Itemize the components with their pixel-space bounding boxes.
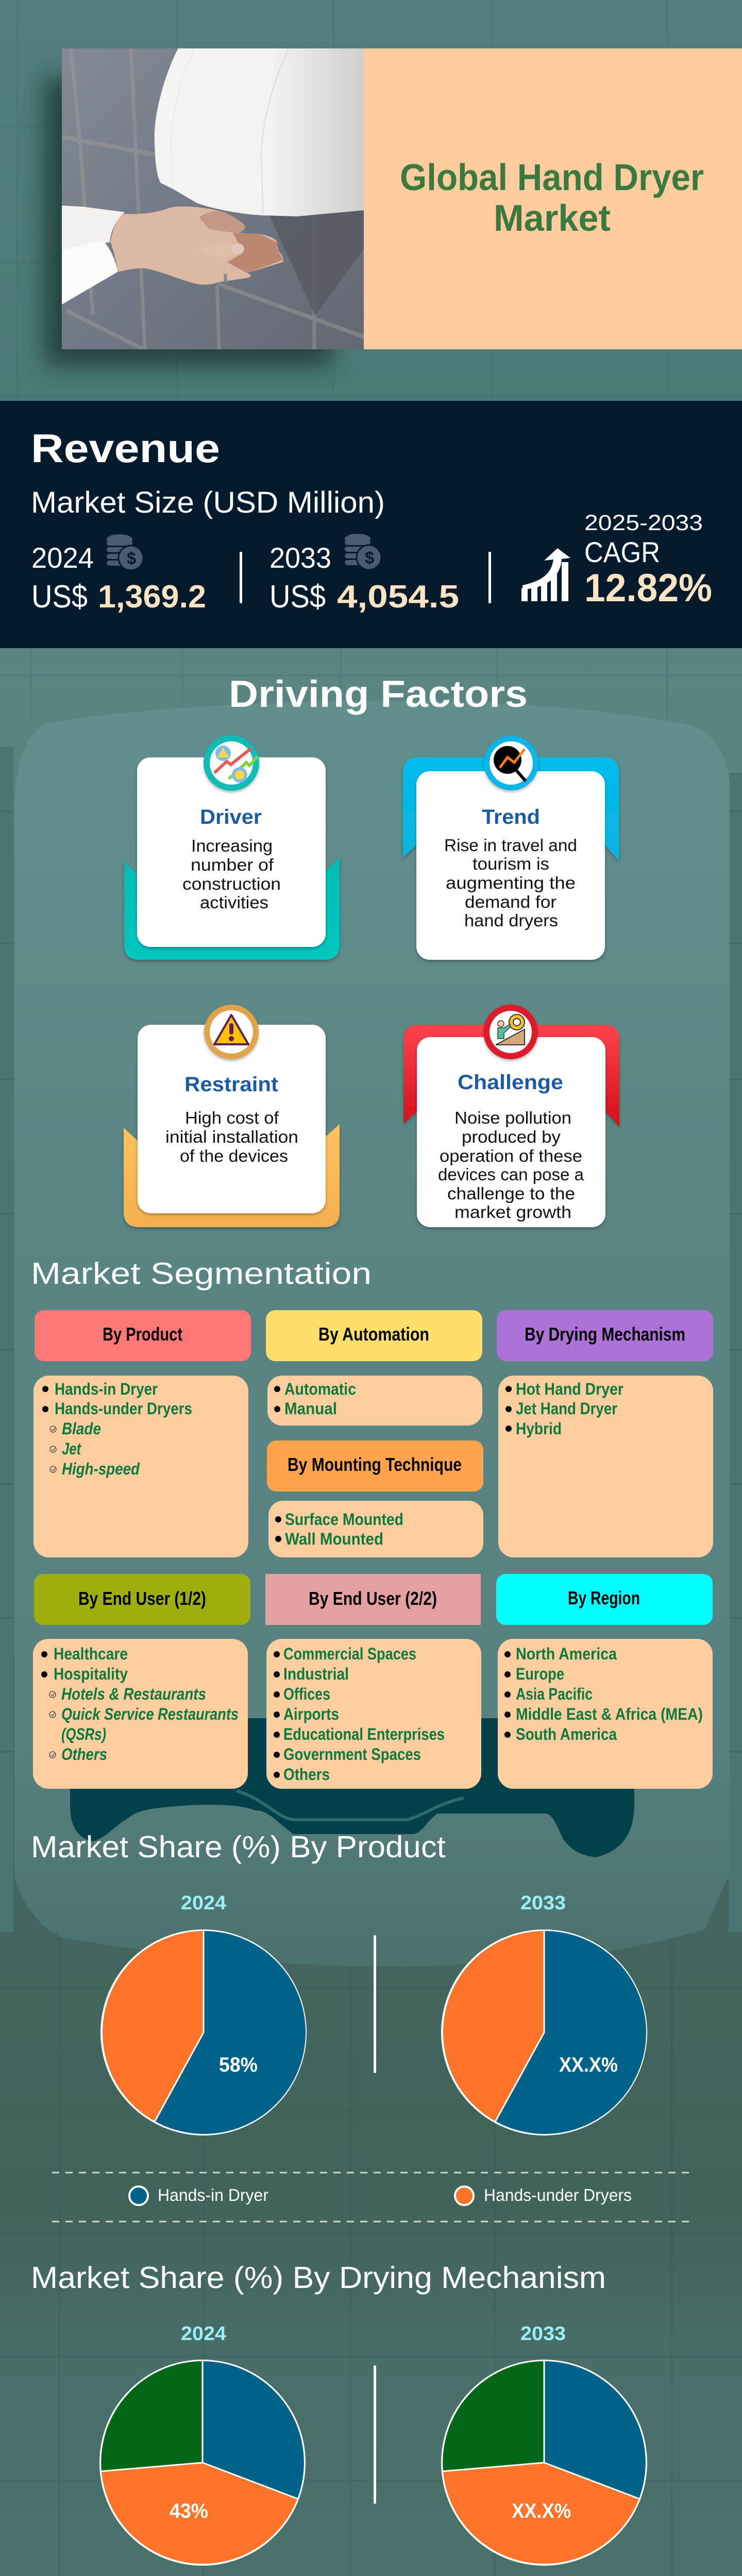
restraint text: of the devices xyxy=(180,1146,288,1165)
challenge text: challenge to the xyxy=(447,1184,575,1203)
challenge text: produced by xyxy=(462,1127,561,1146)
segment: by end user 1: By End User (1/2) xyxy=(78,1588,206,1609)
segment: by mounting technique: Surface Mounted xyxy=(285,1510,403,1529)
segment: by end user 2: Industrial xyxy=(283,1665,349,1683)
trend text: demand for xyxy=(465,892,556,911)
segment: by region: North America xyxy=(516,1645,617,1663)
segment: by end user 1: Hospitality xyxy=(54,1665,128,1683)
revenue heading: Revenue xyxy=(31,426,220,471)
segment: by drying mechanism: Jet Hand Dryer xyxy=(516,1399,617,1418)
heading: market share by product: Market Share (%) By Product xyxy=(31,1830,446,1864)
driver text xyxy=(182,836,281,912)
card: challenge xyxy=(403,1005,619,1227)
chart: mechanism pie 2033: 2033 xyxy=(520,2323,566,2345)
driver text: construction xyxy=(182,874,281,893)
segment: by end user 2: Educational Enterprises xyxy=(283,1725,445,1743)
icon: coins 2033: $ xyxy=(365,548,374,567)
CAGR: 2025-2033 xyxy=(584,511,703,535)
legend: product: Hands-in Dryer xyxy=(158,2185,268,2205)
chart: mechanism pie 2033: XX.X% xyxy=(512,2500,571,2522)
card: driver xyxy=(124,735,340,960)
segment: by mounting technique xyxy=(267,1440,483,1557)
2024 value: 2024 xyxy=(31,541,94,574)
title: Market xyxy=(494,198,611,239)
divider xyxy=(374,1935,376,2073)
chart: mechanism pie 2024 xyxy=(99,2323,306,2566)
segment: by automation: Manual xyxy=(284,1399,337,1418)
segment: by end user 1: (QSRs) xyxy=(61,1725,106,1743)
segment: by region: South America xyxy=(516,1725,617,1743)
segment: by end user 2 xyxy=(265,1574,481,1789)
segment: by region: Middle East & Africa (MEA) xyxy=(516,1705,703,1723)
chart: mechanism pie 2024: 2024 xyxy=(181,2323,226,2345)
heading: market segmentation: Market Segmentation xyxy=(31,1257,372,1291)
segment: by mounting technique: Wall Mounted xyxy=(285,1530,383,1548)
segment: by end user 1 xyxy=(33,1574,250,1789)
heading: driving factors: Driving Factors xyxy=(229,673,528,715)
heading: market share by drying mechanism: Market Share (%) By Drying Mechanism xyxy=(31,2261,606,2295)
segment: by drying mechanism xyxy=(497,1310,713,1557)
segment: by product: Hands-in Dryer xyxy=(55,1380,158,1398)
chart: product pie 2033: XX.X% xyxy=(559,2054,618,2076)
2033 value xyxy=(269,541,459,615)
challenge text: Noise pollution xyxy=(454,1108,571,1127)
hero photo: hands under a white dryer xyxy=(57,45,369,357)
driver title: Driver xyxy=(200,806,262,828)
2024 value: US$ xyxy=(31,579,88,615)
segment: by drying mechanism: By Drying Mechanism xyxy=(525,1324,685,1345)
restraint text: initial installation xyxy=(165,1127,298,1146)
divider xyxy=(488,552,491,603)
restraint text xyxy=(165,1108,298,1165)
2024 value xyxy=(31,541,206,615)
segment: by mounting technique: By Mounting Technique xyxy=(288,1454,462,1475)
photo shadow xyxy=(44,77,332,366)
chart: product pie 2033 xyxy=(441,1892,647,2136)
segment: by product: Blade xyxy=(62,1419,101,1438)
title xyxy=(400,157,704,239)
challenge text xyxy=(438,1108,584,1222)
chart: product pie 2024: 58% xyxy=(219,2054,258,2076)
revenue band xyxy=(0,401,742,648)
segment: by region: By Region xyxy=(568,1587,640,1608)
segment: by end user 1: Healthcare xyxy=(54,1645,128,1663)
trend text: tourism is xyxy=(473,854,549,873)
icon: growth arrow xyxy=(521,548,570,601)
title panel xyxy=(364,48,742,349)
icon: warning triangle xyxy=(214,1015,248,1044)
segment: by end user 2: Offices xyxy=(283,1685,330,1703)
segment: by product: Hands-under Dryers xyxy=(55,1399,192,1418)
CAGR: CAGR xyxy=(584,536,660,568)
card: trend xyxy=(403,736,619,960)
trend text: hand dryers xyxy=(464,911,558,930)
segment: by end user 2: Airports xyxy=(283,1705,339,1723)
challenge text: operation of these xyxy=(440,1146,582,1165)
segment: by automation: By Automation xyxy=(318,1324,429,1345)
2033 value: 4,054.5 xyxy=(337,579,459,615)
icon: magnifier with trend line xyxy=(494,746,526,781)
segment: by automation: Automatic xyxy=(284,1380,356,1398)
segment: by product: By Product xyxy=(103,1324,182,1345)
chart: product pie 2024: 2024 xyxy=(181,1892,226,1914)
segment: by product xyxy=(33,1310,251,1557)
segment: by end user 1: Hotels & Restaurants xyxy=(61,1685,206,1703)
driver text: activities xyxy=(200,893,268,912)
icon: coins 2033 xyxy=(345,534,381,570)
chart: product pie 2024 xyxy=(100,1892,307,2136)
trend text xyxy=(444,836,577,930)
challenge title: Challenge xyxy=(458,1071,563,1094)
challenge text: devices can pose a xyxy=(438,1165,584,1184)
segment: by product: High-speed xyxy=(62,1460,140,1478)
chart: product pie 2033: 2033 xyxy=(520,1892,566,1914)
challenge text: market growth xyxy=(454,1202,571,1222)
segment: by end user 1: Quick Service Restaurants xyxy=(61,1705,239,1723)
divider xyxy=(240,552,242,603)
segment: by drying mechanism: Hot Hand Dryer xyxy=(516,1380,623,1398)
title: Global Hand Dryer xyxy=(400,157,704,198)
icon: driver arrows and gears xyxy=(214,745,258,783)
trend text: Rise in travel and xyxy=(444,836,577,855)
segment: by drying mechanism: Hybrid xyxy=(516,1419,562,1438)
segment: by end user 2: Government Spaces xyxy=(283,1745,421,1764)
market size label: Market Size (USD Million) xyxy=(31,486,385,519)
segment: by automation xyxy=(266,1310,482,1426)
CAGR: 12.82% xyxy=(584,566,712,610)
driver text: number of xyxy=(191,855,274,874)
segment: by end user 2: By End User (2/2) xyxy=(309,1588,437,1609)
restraint title: Restraint xyxy=(184,1073,278,1096)
legend: product: Hands-under Dryers xyxy=(484,2185,632,2205)
chart: mechanism pie 2024: 43% xyxy=(170,2500,208,2522)
2033 value: 2033 xyxy=(269,541,331,574)
segment: by region: Europe xyxy=(516,1665,564,1683)
driver text: Increasing xyxy=(191,836,273,855)
2033 value: US$ xyxy=(269,579,326,615)
card: restraint xyxy=(124,1005,340,1227)
divider xyxy=(374,2365,376,2504)
segment: by end user 2: Commercial Spaces xyxy=(283,1645,416,1663)
icon: coins 2024 xyxy=(107,534,143,570)
segment: by end user 1: Others xyxy=(61,1745,107,1764)
segment: by region: Asia Pacific xyxy=(516,1685,593,1703)
2024 value: 1,369.2 xyxy=(98,579,206,615)
trend title: Trend xyxy=(482,806,540,828)
restraint text: High cost of xyxy=(185,1108,279,1127)
icon: coins 2024: $ xyxy=(127,549,136,568)
chart: mechanism pie 2033 xyxy=(441,2323,647,2566)
legend: product xyxy=(52,2173,695,2222)
icon: person pushing gear up a slope xyxy=(496,1014,525,1045)
segment: by product: Jet xyxy=(62,1439,81,1458)
CAGR xyxy=(584,511,712,610)
segment: by end user 2: Others xyxy=(283,1765,330,1784)
segment: by region xyxy=(496,1574,713,1789)
trend text: augmenting the xyxy=(446,873,576,892)
